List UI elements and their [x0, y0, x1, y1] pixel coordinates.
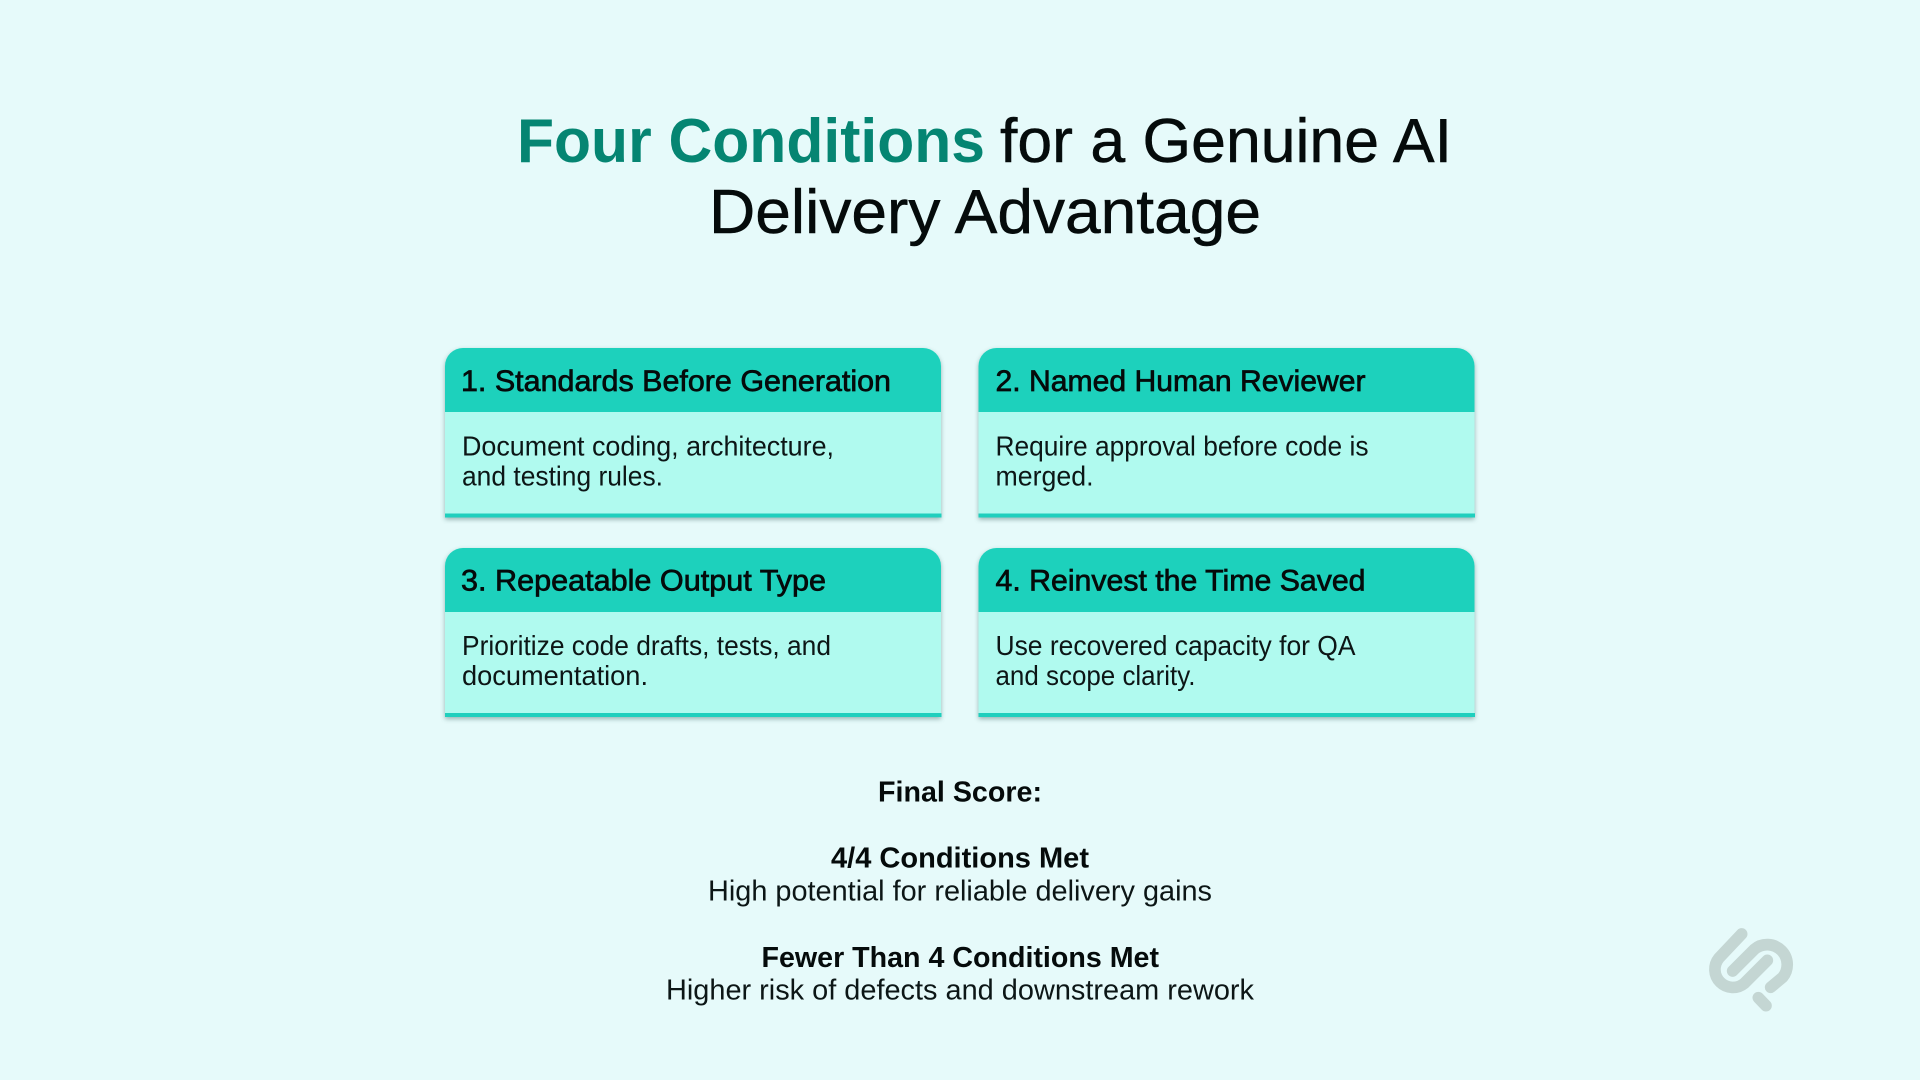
final score text block: High potential for reliable delivery gains: [708, 876, 1212, 908]
title: for a Genuine AI: [1000, 107, 1452, 176]
panel: condition 1: [445, 348, 942, 518]
panel: condition 3: Prioritize code drafts, tests, and: [462, 630, 831, 661]
panel: condition 4: and scope clarity.: [996, 660, 1196, 691]
panel: condition 3: 3. Repeatable Output Type: [461, 564, 826, 598]
panel: condition 3: documentation.: [462, 660, 648, 691]
panel: condition 4: 4. Reinvest the Time Saved: [996, 564, 1366, 598]
final score text block: Fewer Than 4 Conditions Met: [762, 942, 1159, 974]
final score text block: [666, 777, 1254, 1006]
title: [517, 107, 1452, 247]
panel: condition 4: [978, 548, 1475, 717]
panel: condition 2: 2. Named Human Reviewer: [996, 365, 1366, 398]
icon: paperclip logo: [1715, 934, 1787, 1006]
title: Four Conditions: [517, 107, 985, 176]
panel: condition 1: 1. Standards Before Generation: [461, 365, 891, 398]
panel: condition 1: and testing rules.: [462, 460, 663, 492]
title: Delivery Advantage: [709, 178, 1261, 247]
final score text block: 4/4 Conditions Met: [831, 842, 1089, 874]
final score text block: Final Score:: [878, 777, 1042, 809]
panel: condition 1: Document coding, architecture,: [462, 430, 834, 462]
panel: condition 2: merged.: [996, 460, 1094, 492]
final score text block: Higher risk of defects and downstream rework: [666, 974, 1254, 1006]
panel: condition 2: [978, 348, 1475, 518]
panel: condition 3: [445, 548, 942, 717]
panel: condition 4: Use recovered capacity for QA: [996, 630, 1356, 661]
panel: condition 2: Require approval before code is: [996, 430, 1368, 462]
